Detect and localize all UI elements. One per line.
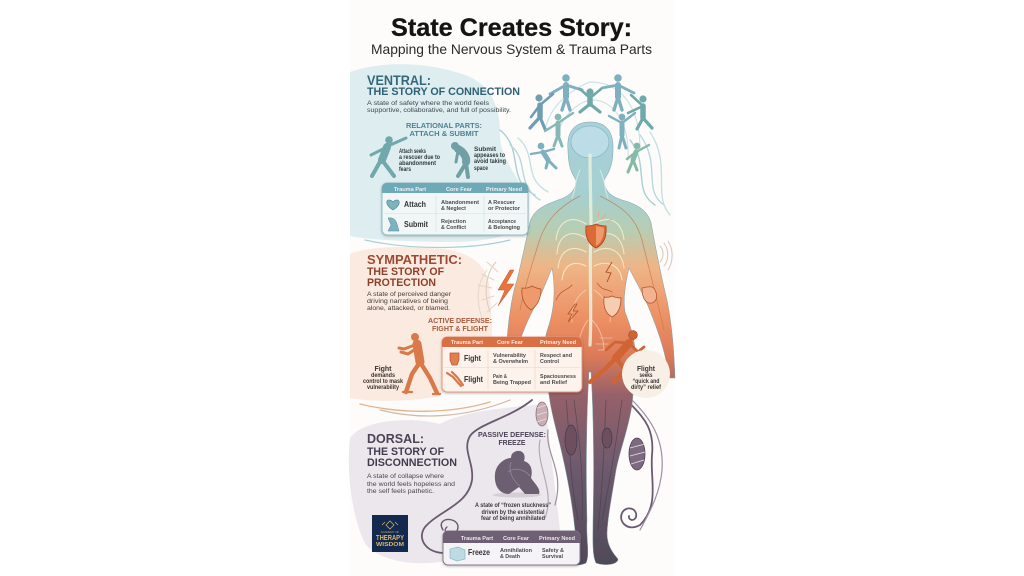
ventral description: A state of safety where the world feels [367, 100, 489, 107]
fight text: Fight [374, 366, 392, 373]
dorsal description: A state of collapse where [367, 473, 444, 480]
table: freeze: Safety & [542, 548, 564, 554]
sympathetic heading: THE STORY OF [367, 266, 444, 278]
icon: lightning abdomen [568, 304, 578, 322]
table: active defense: Vulnerability [493, 353, 527, 359]
relational parts heading: ATTACH & SUBMIT [410, 129, 479, 138]
dorsal vines [422, 400, 662, 553]
flight callout: Flight [637, 366, 656, 373]
attach text [399, 149, 440, 173]
dorsal heading: THE STORY OF [367, 446, 444, 458]
table: relational parts: & Neglect [441, 206, 466, 212]
flight callout [622, 350, 670, 398]
table: relational parts: Attach [404, 199, 426, 209]
submit text: avoid taking [474, 159, 506, 165]
poster background [350, 0, 674, 576]
table: relational parts: A Rescuer [488, 200, 516, 206]
table: active defense: Core Fear [497, 340, 524, 346]
fight text [363, 366, 404, 391]
icon: lightning left [498, 270, 514, 306]
icon: shield abdomen [604, 296, 621, 317]
active defense heading [428, 316, 492, 333]
sympathetic description: A state of perceived danger [367, 291, 452, 298]
relational parts heading [406, 121, 482, 138]
body silhouette [506, 122, 675, 565]
table: active defense: Fight [464, 353, 481, 363]
freeze text: fear of being annihilated [481, 516, 545, 522]
flight callout: dirty” relief [631, 385, 662, 391]
icon: shield right arm [642, 287, 657, 303]
table: active defense: Spaciousness [540, 374, 576, 380]
figure: top left [550, 74, 582, 110]
figure: top centre [580, 88, 601, 112]
table: active defense: Primary Need [540, 340, 577, 346]
figure: upper left [530, 94, 553, 129]
table: relational parts: & Belonging [488, 225, 520, 231]
body nerves and ribs [520, 155, 664, 530]
passive defense heading: PASSIVE DEFENSE: [478, 430, 546, 439]
table: active defense: Being Trapped [493, 380, 531, 386]
freeze text [475, 503, 551, 522]
table: freeze: Core Fear [503, 536, 530, 542]
burst lines [478, 241, 672, 312]
icon: heart [387, 200, 399, 210]
table: freeze: Annihilation [500, 548, 532, 554]
figure: middle left [545, 113, 573, 146]
fight text: vulnerability [367, 385, 400, 391]
dorsal description: the self feels pathetic. [367, 488, 434, 495]
table: relational parts [382, 183, 528, 235]
sympathetic heading [367, 252, 462, 289]
icon: heart shield [586, 212, 612, 248]
table: freeze [443, 531, 580, 565]
submit text: Submit [474, 147, 496, 153]
submit text: appeases to [474, 153, 505, 159]
table: relational parts: Core Fear [446, 187, 473, 193]
panel: dorsal background [349, 404, 560, 563]
figure: runner [590, 331, 644, 382]
icon: fist [450, 353, 459, 365]
flight callout: “quick and [632, 379, 660, 385]
table: active defense: and Relief [540, 380, 567, 386]
dorsal description [367, 473, 455, 495]
logo: THERAPY [376, 535, 404, 542]
dorsal heading [367, 431, 457, 469]
table: freeze: & Death [500, 554, 520, 560]
logo [372, 515, 408, 552]
sympathetic heading: PROTECTION [367, 277, 436, 289]
icon: bowed figure [388, 218, 399, 231]
attach text: fears [399, 167, 412, 173]
figure: fighter [399, 333, 440, 394]
ventral description [367, 100, 511, 114]
table: active defense: Pain & [493, 374, 507, 380]
figure: submit [451, 142, 468, 177]
logo: ACADEMY OF [381, 530, 400, 534]
icon: shield left arm [522, 286, 541, 310]
sympathetic heading: SYMPATHETIC: [367, 252, 462, 267]
figure: lower left [531, 143, 556, 168]
sympathetic description: driving narratives of being [367, 298, 448, 305]
table: relational parts: Trauma Part [394, 187, 426, 193]
table: active defense: Flight [464, 374, 483, 384]
table: freeze: Survival [542, 554, 563, 560]
ventral heading [367, 72, 520, 98]
table: freeze: Primary Need [539, 536, 576, 542]
title: State Creates Story: [391, 14, 632, 42]
table: relational parts: & Conflict [441, 225, 466, 231]
figure: upper right [628, 95, 652, 129]
subtitle: Mapping the Nervous System & Trauma Parts [371, 41, 652, 57]
table: active defense: Respect and [540, 353, 572, 359]
figure: attach [371, 136, 406, 176]
table: relational parts: Rejection [441, 219, 466, 225]
table: active defense: Trauma Part [451, 340, 483, 346]
freeze text: A state of “frozen stuckness” [475, 503, 551, 509]
passive defense heading: FREEZE [498, 438, 526, 447]
dorsal heading: DISCONNECTION [367, 457, 457, 469]
dorsal heading: DORSAL: [367, 431, 424, 446]
table: active defense [442, 337, 582, 392]
figure: top right [602, 74, 634, 110]
passive defense heading [478, 430, 546, 447]
fight text: control to mask [363, 379, 404, 385]
figure: middle right [609, 113, 635, 148]
freeze text: driven by the existential [482, 510, 545, 516]
body brain [571, 126, 609, 158]
icon: running legs [447, 372, 463, 386]
decorative waves [360, 130, 670, 416]
dorsal description: the world feels hopeless and [367, 481, 455, 488]
panel: ventral background [350, 64, 528, 242]
table: freeze: Freeze [468, 547, 490, 557]
fight text: demands [371, 373, 396, 379]
table: freeze: Trauma Part [461, 536, 493, 542]
logo: WISDOM [376, 542, 404, 548]
ventral heading: THE STORY OF CONNECTION [367, 86, 520, 98]
table: relational parts: Primary Need [486, 187, 523, 193]
attach text: Attach seeks [399, 149, 426, 155]
sympathetic description: alone, attacked, or blamed. [367, 305, 450, 312]
icon: lightning chest [606, 262, 612, 282]
panel: sympathetic background [350, 247, 492, 401]
ventral heading: VENTRAL: [367, 72, 431, 88]
icon: ice cube [450, 547, 465, 561]
submit text: space [474, 166, 489, 172]
table: relational parts: Abandonment [441, 200, 479, 206]
table: relational parts: Acceptance [488, 219, 517, 225]
table: active defense: Control [540, 359, 559, 365]
table: relational parts: or Protector [488, 206, 521, 212]
figure: freeze [493, 451, 541, 498]
active defense heading: ACTIVE DEFENSE: [428, 316, 492, 325]
sympathetic description [367, 291, 452, 312]
flight callout: seeks [640, 373, 653, 379]
table: active defense: & Overwhelm [493, 359, 528, 365]
relational parts heading: RELATIONAL PARTS: [406, 121, 482, 130]
attach text: a rescuer due to [399, 155, 440, 161]
active defense heading: FIGHT & FLIGHT [432, 324, 488, 333]
icon: cocoons [536, 402, 645, 470]
submit text [474, 147, 506, 172]
ventral description: supportive, collaborative, and full of possibility. [367, 107, 511, 114]
table: relational parts: Submit [404, 219, 428, 229]
attach text: abandonment [399, 161, 436, 167]
figure: lower right [627, 143, 649, 172]
connection ring of people [530, 74, 652, 172]
